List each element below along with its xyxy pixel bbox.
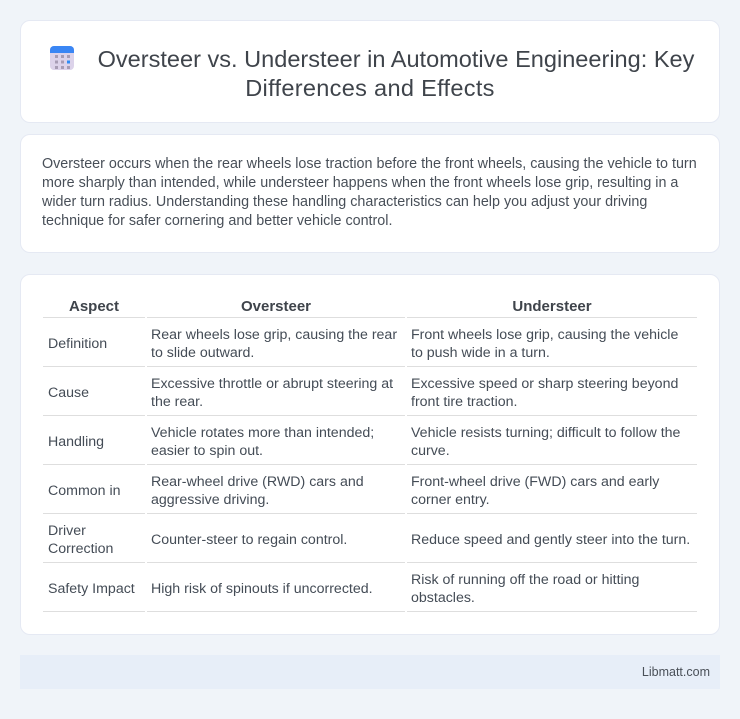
footer text: Libmatt.com (642, 665, 710, 679)
row: handling: Vehicle resists turning; difficult to follow the (411, 425, 680, 441)
table header (69, 298, 592, 315)
row: safety impact: obstacles. (411, 590, 475, 606)
panel: header (20, 20, 720, 123)
row: cause (48, 376, 678, 410)
row: cause: Excessive throttle or abrupt steering at (151, 376, 393, 392)
row: cause: front tire traction. (411, 394, 517, 410)
text block: introduction (42, 156, 697, 229)
row: driver correction: Driver (48, 523, 86, 539)
row: driver correction: Counter-steer to regain control. (151, 532, 347, 548)
row: common in: corner entry. (411, 492, 490, 508)
text block: introduction: Oversteer occurs when the rear wheels lose traction before the front wheels, causing the vehicle to turn (42, 156, 697, 172)
row: safety impact: Risk of running off the road or hitting (411, 572, 639, 588)
row: common in: Common in (48, 483, 121, 499)
row: common in: aggressive driving. (151, 492, 269, 508)
text block: introduction: technique for safer cornering and better vehicle control. (42, 213, 392, 229)
table header: Understeer (512, 298, 592, 315)
row: handling: Handling (48, 434, 104, 450)
row: definition: to push wide in a turn. (411, 345, 550, 361)
title: Oversteer vs. Understeer in Automotive Engineering: Key (98, 46, 694, 72)
row: cause: Excessive speed or sharp steering beyond (411, 376, 678, 392)
row: handling: easier to spin out. (151, 443, 263, 459)
row: definition: Front wheels lose grip, causing the vehicle (411, 327, 678, 343)
row: cause: the rear. (151, 394, 203, 410)
row: driver correction: Correction (48, 541, 113, 557)
text block: introduction: more sharply than intended, while understeer happens when the front wheels lose grip, resulting in a (42, 175, 678, 191)
panel: introduction (20, 134, 720, 253)
title (98, 46, 694, 101)
row: common in: Front-wheel drive (FWD) cars and early (411, 474, 659, 490)
row: safety impact: High risk of spinouts if uncorrected. (151, 581, 373, 597)
row: handling: curve. (411, 443, 450, 459)
row: common in (48, 474, 660, 508)
row: handling (48, 425, 680, 459)
row: safety impact: Safety Impact (48, 581, 135, 597)
footer (20, 655, 720, 689)
row: definition: to slide outward. (151, 345, 254, 361)
row: common in: Rear-wheel drive (RWD) cars and (151, 474, 364, 490)
table header: Aspect (69, 298, 119, 315)
row: driver correction: Reduce speed and gently steer into the turn. (411, 532, 690, 548)
row: cause: Cause (48, 385, 89, 401)
icon: calendar (50, 46, 74, 70)
row: definition (48, 327, 678, 361)
text block: introduction: wider turn radius. Understanding these handling characteristics can help you adjust your driving (42, 194, 647, 210)
row: definition: Rear wheels lose grip, causing the rear (151, 327, 397, 343)
panel: comparison table (20, 274, 720, 635)
title: Differences and Effects (245, 75, 495, 101)
row: definition: Definition (48, 336, 107, 352)
row: driver correction (48, 523, 690, 557)
row: handling: Vehicle rotates more than intended; (151, 425, 374, 441)
row: safety impact (48, 572, 639, 606)
table header: Oversteer (241, 298, 311, 315)
